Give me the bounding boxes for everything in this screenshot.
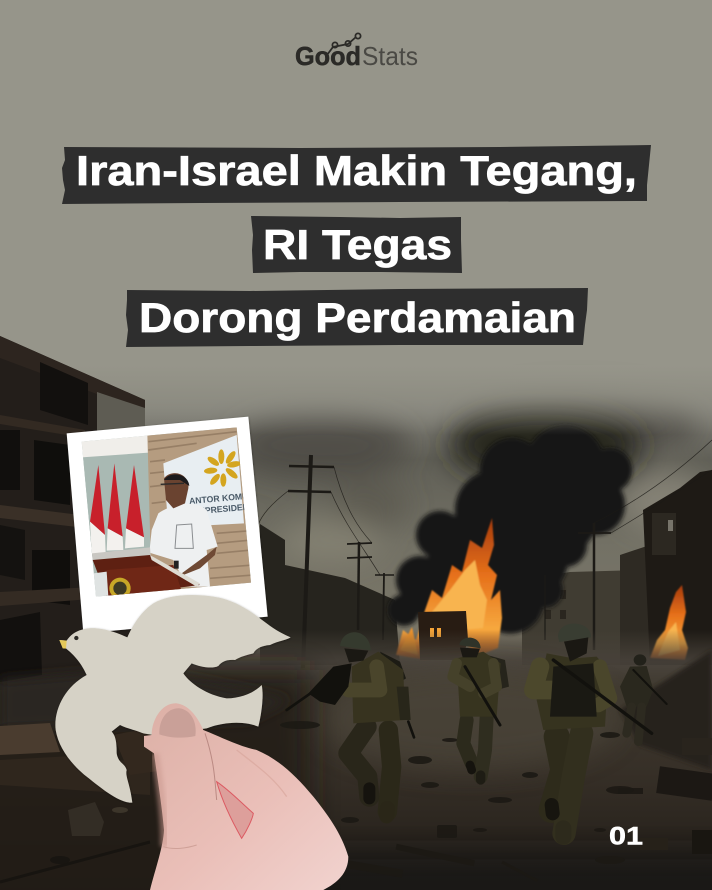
rubble right [618,650,712,854]
road haze [320,670,620,770]
speaker photo: EPRESIDEN [199,502,249,516]
logo chart line [327,33,361,55]
title tape line 1: Iran-Israel Makin Tegang, [76,147,637,194]
title [62,145,651,347]
podium [92,547,200,599]
title tape line 2 [251,216,462,273]
left debris foreground [0,668,290,882]
soldier left [287,632,414,816]
left ground shade [0,670,310,890]
dove beak [59,640,67,649]
hand [144,703,348,890]
wood wall [147,423,253,593]
logo wordmark light: Stats [362,41,418,71]
dove eye [74,636,78,640]
utility poles and wires [258,440,712,668]
speaker [149,473,218,587]
title tape line 3 [126,288,588,347]
finger crease [217,782,253,838]
soldier right [533,624,652,837]
grey smoke clouds [230,393,710,562]
logo: GoodStats [295,33,418,71]
page number: 01 [609,822,643,850]
title tape line 3: Dorong Perdamaian [139,294,576,341]
soldier far right [620,654,667,742]
ground [0,630,712,890]
burning ruin [418,611,468,660]
polaroid photo [67,417,268,633]
black smoke column [388,407,640,634]
soldiers [287,624,667,837]
thumb shading [155,753,164,847]
title tape line 2: RI Tegas [263,221,452,268]
left ruined building [0,336,145,690]
yellow emblem [204,449,241,487]
title tape line 1 [62,145,651,204]
right flames [650,585,688,660]
screen text: ANTOR KOMU [189,491,249,506]
bottom ground shade [300,850,712,890]
war scene photo [0,336,712,890]
background buildings [260,470,712,665]
screen [163,435,244,527]
paper dove [55,595,291,803]
thumb nail [159,708,196,738]
soldier centre [453,638,509,780]
polaroid frame [67,417,268,633]
logo wordmark bold: Good [295,41,361,71]
speaker photo [82,428,251,596]
rubble scatter [280,721,634,882]
flags [90,463,144,554]
hand holding paper dove [55,595,348,890]
smoke top fade [0,365,712,435]
central flames [396,518,502,660]
sky [0,370,712,690]
